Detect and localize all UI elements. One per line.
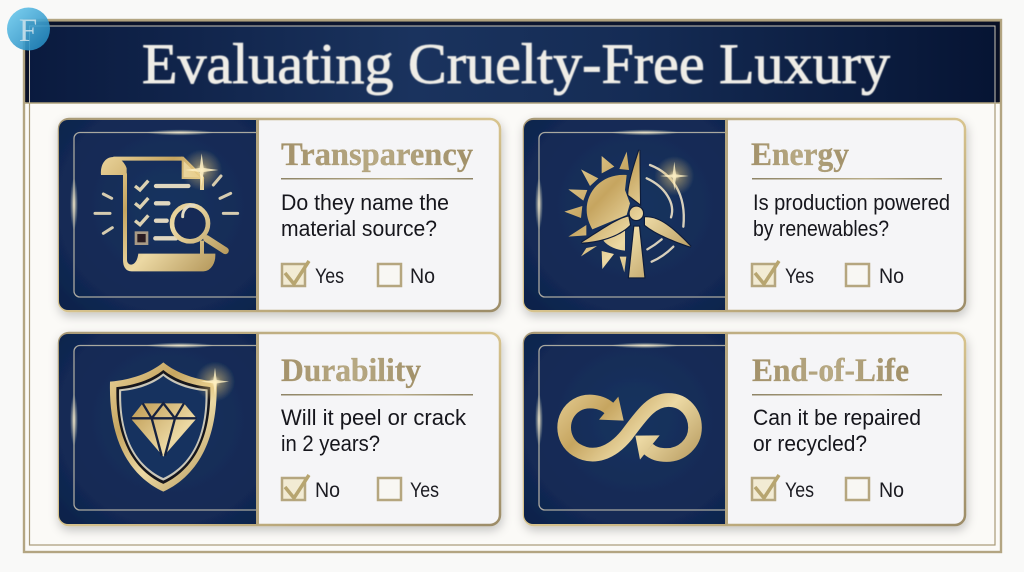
title: Evaluating Cruelty-Free Luxury [142,33,890,96]
card body [59,119,500,311]
heading: Energy [751,137,849,173]
checkbox: no [378,264,435,288]
icon panel [524,334,726,524]
icon panel [59,334,257,524]
checkbox: no: No [410,264,435,288]
checkbox: yes checked: Yes [315,264,344,288]
inner frame [535,342,726,510]
question: or recycled? [753,431,867,456]
logo badge [7,8,50,50]
question: Can it be repaired [753,405,921,430]
checkbox: yes: Yes [410,478,439,502]
icon: shield with diamond [110,362,235,492]
inner frame [70,130,257,297]
logo badge: F [19,13,37,49]
question: Will it peel or crack [281,405,467,430]
checkbox: yes [378,478,439,502]
checkbox: yes checked [752,261,814,288]
panel: transparency [59,119,500,311]
card body [524,119,965,311]
panel: end-of-life [524,333,965,525]
checkbox: no: No [879,264,904,288]
question: Is production powered [753,190,950,215]
question [753,405,921,456]
inner frame [535,130,726,297]
heading: Durability [281,353,421,389]
question: Do they name the [281,190,449,215]
checkbox: yes checked: Yes [785,264,814,288]
header banner [25,21,1000,103]
heading: End-of-Life [752,353,909,389]
checkbox: no: No [879,478,904,502]
icon: sun and wind turbine [564,150,694,277]
heading: Transparency [281,137,473,173]
checkbox: no [846,478,904,502]
question [281,405,467,456]
question: material source? [281,216,437,241]
question [281,190,449,241]
question [753,190,950,241]
icon: document with magnifier [95,149,238,269]
panel: durability [59,333,500,525]
icon: infinity loop with arrows [564,397,695,460]
icon panel [59,120,257,310]
checkbox: yes checked [752,475,814,502]
checkbox: yes checked [282,261,344,288]
checkbox: no checked [282,475,340,502]
card body [59,333,500,525]
card body [524,333,965,525]
checkbox: no [846,264,904,288]
inner frame [70,342,257,510]
question: by renewables? [753,216,889,241]
checkbox: yes checked: Yes [785,478,814,502]
panel: energy [524,119,965,311]
question: in 2 years? [281,431,380,456]
checkbox: no checked: No [315,478,340,502]
icon panel [524,120,726,310]
